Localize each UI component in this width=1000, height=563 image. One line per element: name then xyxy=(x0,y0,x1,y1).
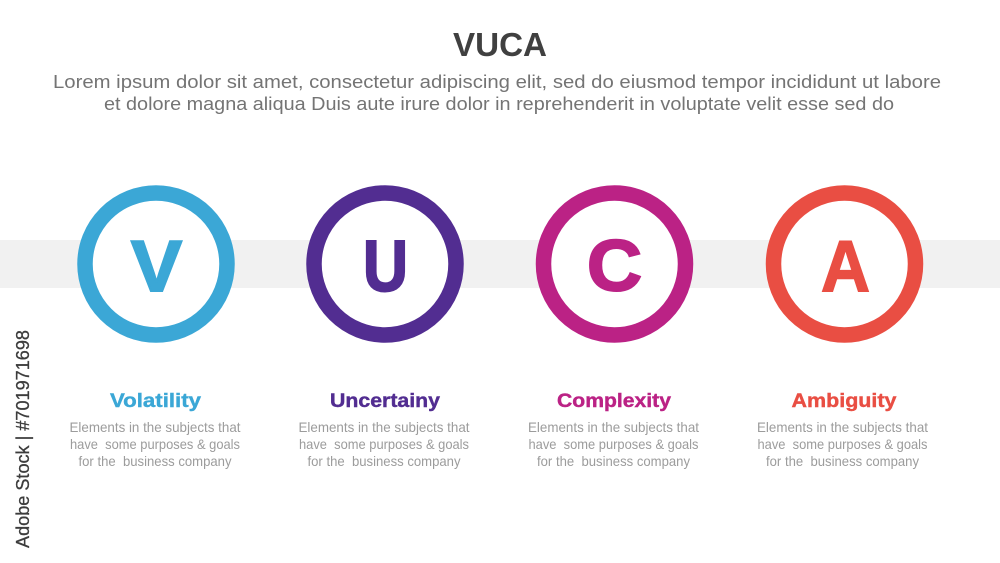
background band xyxy=(0,240,1000,288)
heading: Ambiguity: Ambiguity xyxy=(792,391,897,412)
description: Uncertainy: Elements in the subjects that xyxy=(298,419,470,435)
column: Uncertainy xyxy=(298,193,470,469)
column: Ambiguity xyxy=(757,193,928,469)
subtitle text xyxy=(53,72,941,114)
column: Complexity xyxy=(528,193,699,469)
description: Uncertainy: have some purposes & goals xyxy=(299,436,469,452)
icon: circle U xyxy=(314,193,456,335)
description: Complexity: Elements in the subjects that xyxy=(528,419,699,435)
icon: circle V xyxy=(85,193,227,335)
description: Volatility xyxy=(70,419,241,469)
description: Volatility: for the business company xyxy=(78,453,232,469)
description: Complexity: have some purposes & goals xyxy=(528,436,698,452)
description: Volatility: Elements in the subjects that xyxy=(70,419,241,435)
heading: Volatility: Volatility xyxy=(110,391,201,412)
heading: Complexity: Complexity xyxy=(557,391,671,412)
subtitle text: Lorem ipsum dolor sit amet, consectetur adipiscing elit, sed do eiusmod tempor incididunt ut labore xyxy=(53,72,941,92)
watermark: Adobe Stock id: Adobe Stock | #701971698 xyxy=(12,330,33,548)
description: Ambiguity xyxy=(757,419,928,469)
column: Volatility xyxy=(70,193,241,469)
icon: circle A: A xyxy=(821,227,870,307)
title: VUCA xyxy=(453,26,547,63)
description: Complexity: for the business company xyxy=(537,453,690,469)
description: Ambiguity: Elements in the subjects that xyxy=(757,419,928,435)
icon: circle C xyxy=(544,193,686,335)
description: Complexity xyxy=(528,419,699,469)
icon: circle A xyxy=(774,193,916,335)
description: Ambiguity: have some purposes & goals xyxy=(758,436,928,452)
description: Uncertainy xyxy=(298,419,470,469)
description: Volatility: have some purposes & goals xyxy=(70,436,240,452)
description: Uncertainy: for the business company xyxy=(308,453,460,469)
subtitle text: et dolore magna aliqua Duis aute irure dolor in reprehenderit in voluptate velit esse sed do xyxy=(104,94,894,114)
heading: Uncertainy: Uncertainy xyxy=(330,391,440,412)
icon: circle U: U xyxy=(363,227,408,307)
icon: circle C: C xyxy=(587,226,642,306)
icon: circle V: V xyxy=(131,227,182,307)
description: Ambiguity: for the business company xyxy=(766,453,919,469)
